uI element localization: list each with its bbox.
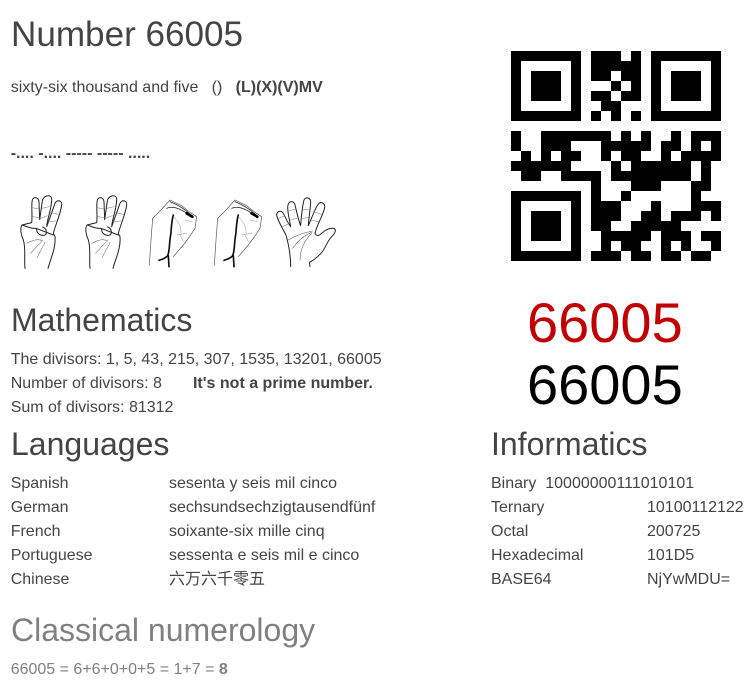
translations: soixante-six mille cinq (169, 523, 325, 540)
translations: sesenta y seis mil cinco (169, 475, 337, 492)
base values (647, 499, 744, 588)
base values: 200725 (647, 523, 700, 540)
translations: sessenta e seis mil e cinco (169, 547, 359, 564)
language names: Portuguese (11, 547, 93, 564)
language names: French (11, 523, 60, 540)
icon: hand sign 0 (149, 200, 197, 267)
languages table (11, 475, 376, 588)
base values: 10100112122 (647, 499, 744, 516)
language names: Spanish (11, 475, 69, 492)
icon: hand sign 5 (277, 198, 335, 267)
informatics table (491, 475, 744, 588)
number in words and roman numeral: sixty-six thousand and five () (L)(X)(V)MV (11, 79, 323, 96)
base values: 101D5 (647, 547, 694, 564)
heading: Mathematics: Mathematics (11, 302, 192, 338)
base values: NjYwMDU= (647, 571, 730, 588)
icon: hand sign 6 (21, 196, 62, 268)
base labels: Octal (491, 523, 528, 540)
language names: Chinese (11, 571, 69, 588)
translations: 六万六千零五 (169, 571, 265, 588)
icon: hand sign 6 second (86, 196, 127, 268)
sign language hands (20, 195, 336, 269)
large black number: 66005 (527, 353, 683, 416)
QR code (511, 51, 721, 261)
numerology calculation: 66005 = 6+6+0+0+5 = 1+7 = 8 (11, 661, 228, 678)
binary value: Binary 10000000111010101 (491, 475, 694, 492)
large red number: 66005 (527, 291, 683, 354)
language names (11, 475, 93, 588)
base labels (491, 499, 583, 588)
base labels: Hexadecimal (491, 547, 583, 564)
icon: hand sign 0 second (214, 200, 262, 267)
title: Number 66005 (11, 15, 243, 54)
language names: German (11, 499, 68, 516)
heading: Informatics: Informatics (491, 426, 647, 462)
translations: sechsundsechzigtausendfünf (169, 499, 375, 516)
translations (169, 475, 376, 588)
heading: Languages: Languages (11, 426, 169, 462)
divisors text block (11, 351, 382, 416)
base labels: BASE64 (491, 571, 551, 588)
morse code: -.... -.... ----- ----- ..... (11, 145, 150, 162)
base labels: Ternary (491, 499, 544, 516)
sum of divisors: Sum of divisors: 81312 (11, 399, 173, 416)
number of divisors and prime status: Number of divisors: 8 It's not a prime number. (11, 375, 373, 392)
divisors list: The divisors: 1, 5, 43, 215, 307, 1535, 13201, 66005 (11, 351, 382, 368)
heading: Classical numerology: Classical numerology (11, 612, 315, 648)
